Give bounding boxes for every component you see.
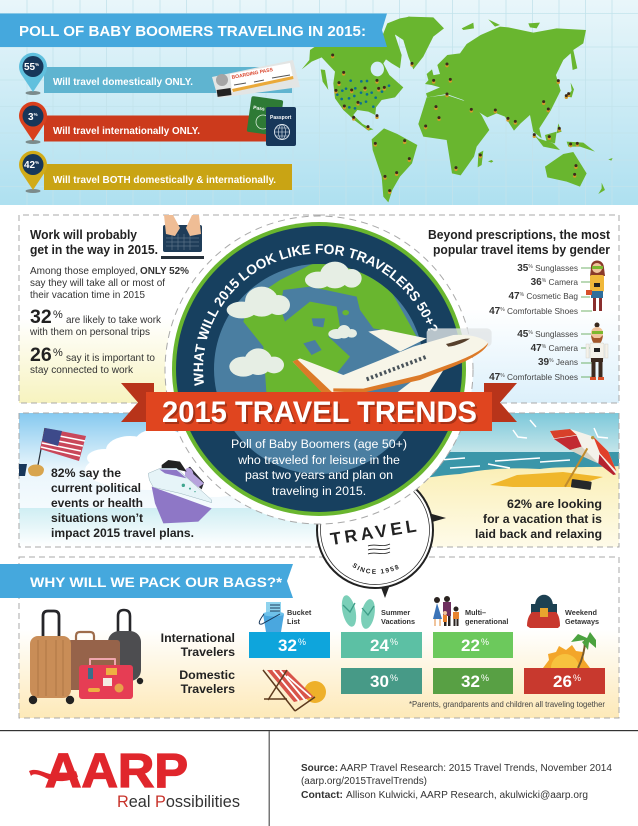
- icon: passports: Pass: [253, 105, 265, 113]
- list: women items: %: [500, 307, 505, 313]
- clouds on globe: [227, 262, 362, 377]
- row: 42 percent both: Will travel BOTH domestically & internationally.: [53, 175, 276, 186]
- row: 55 percent domestic: [19, 53, 292, 95]
- heading: items: popular travel items by gender: [433, 242, 610, 257]
- text: 62 percent: for a vacation that is: [483, 513, 603, 526]
- ring title: what will 2015 look like: WHAT WILL 2015 LOOK LIKE FOR TRAVELERS 50+?: [194, 244, 438, 386]
- row: 42 percent both: 42: [24, 160, 35, 171]
- list: men items: 47: [489, 372, 501, 383]
- list: women items: Comfortable Shoes: [505, 306, 578, 316]
- stat: 26 percent: stay connected to work: [30, 365, 134, 376]
- bar: domestic multi: [433, 668, 513, 694]
- list: women items: Cosmetic Bag: [524, 291, 578, 301]
- label: multi-generational: generational: [465, 617, 508, 626]
- bar: international bucket list: 32: [278, 636, 297, 655]
- icon: man traveler: [586, 322, 608, 380]
- lower navy text block: past two years and plan on: [245, 468, 393, 482]
- bar: domestic multi: %: [481, 673, 489, 683]
- list: men items: 45: [517, 329, 529, 340]
- list: women items: 47: [489, 306, 501, 317]
- bar: international bucket list: %: [298, 637, 306, 647]
- bar: domestic weekend: [524, 668, 605, 694]
- row: 3 percent international: 3: [28, 112, 34, 123]
- row: 3 percent international: [19, 102, 274, 144]
- central globe: [164, 216, 492, 524]
- source and contact text: Source:: [301, 763, 338, 774]
- row labels: Travelers: [181, 682, 235, 696]
- text: 82 percent: situations won’t: [51, 512, 143, 525]
- list: men items: [489, 329, 592, 383]
- text: 62 percent: laid back and relaxing: [475, 528, 602, 541]
- text: employed: their vacation time in 2015: [30, 290, 145, 301]
- list: men items: 39: [538, 357, 550, 368]
- list: women items: Sunglasses: [533, 263, 578, 273]
- stat: 32 percent: are likely to take work: [66, 315, 162, 326]
- list: men items: %: [528, 330, 533, 336]
- label: weekend getaways: Weekend: [565, 608, 597, 617]
- label: bucket list: Bucket: [287, 608, 312, 617]
- icon: beach umbrella: [550, 429, 617, 490]
- logo: AARP: AARP: [45, 745, 188, 798]
- label: weekend getaways: Getaways: [565, 617, 599, 626]
- footer: [0, 730, 638, 826]
- text: employed: ONLY 52%: [140, 266, 189, 277]
- icon: beach towel: [490, 472, 603, 487]
- icon: bucket: [259, 602, 284, 632]
- text: 82 percent: events or health: [51, 497, 143, 510]
- icon: backpack: [527, 595, 560, 628]
- bar: international summer: [341, 632, 422, 658]
- source and contact text: (aarp.org/2015TravelTrends): [301, 776, 427, 787]
- source and contact text: Allison Kulwicki, AARP Research, akulwicki@aarp.org: [346, 790, 588, 801]
- bar: international multi: [433, 632, 513, 658]
- stat: 32 percent: 32: [30, 306, 52, 328]
- logo: AARP: [29, 745, 240, 811]
- bar: domestic weekend: %: [573, 673, 581, 683]
- row labels: Domestic: [179, 668, 235, 682]
- row: 55 percent domestic: Will travel domestically ONLY.: [53, 77, 193, 88]
- main banner: 2015 travel trends: 2015 TRAVEL TRENDS: [162, 396, 477, 429]
- row labels: [161, 631, 235, 696]
- stat: 26 percent: [30, 344, 155, 376]
- icon: family: [433, 596, 459, 626]
- icon: flip-flops: [339, 594, 377, 630]
- row: 55 percent domestic: %: [35, 62, 39, 67]
- stat: 32 percent: %: [53, 309, 63, 321]
- icon: woman traveler: [586, 260, 605, 311]
- heading: work: Work will probably: [30, 227, 138, 242]
- row: 3 percent international: Will travel internationally ONLY.: [53, 126, 200, 137]
- row: 55 percent domestic: 55: [24, 62, 35, 73]
- lower navy text block: Poll of Baby Boomers (age 50+): [231, 437, 407, 451]
- heading: work: get in the way in 2015.: [30, 242, 158, 257]
- world map: [302, 17, 613, 202]
- heading banner: poll: [0, 14, 387, 47]
- label: multi-generational: Multi–: [465, 608, 486, 617]
- list: men items: Jeans: [554, 357, 578, 367]
- text: 82 percent: 82% say the: [51, 467, 122, 480]
- row: 42 percent both: [19, 151, 292, 193]
- panel: why will we pack: [0, 557, 619, 718]
- main banner: 2015 travel trends: 2015 TRAVEL TRENDS: [164, 398, 479, 431]
- bar: international bucket list: [249, 632, 330, 658]
- list: women items: %: [542, 278, 547, 284]
- icon: passports: [247, 96, 296, 146]
- globe earth: [214, 264, 421, 474]
- stat: 26 percent: %: [53, 347, 63, 359]
- bar: international multi: %: [481, 637, 489, 647]
- panel: travel items by gender: [319, 215, 619, 403]
- bar: international summer: 24: [370, 636, 389, 655]
- stat: 32 percent: [29, 306, 162, 338]
- icon: deck chair and ball: [263, 670, 326, 711]
- text: employed: Among those employed,: [30, 266, 138, 277]
- text: 82 percent: impact 2015 travel plans.: [51, 527, 194, 540]
- list: women items: Camera: [546, 277, 578, 287]
- stat: 26 percent: 26: [30, 344, 52, 366]
- row: 3 percent international: %: [34, 112, 38, 117]
- seagulls: [513, 420, 608, 438]
- row labels: International: [161, 631, 235, 645]
- bar: domestic weekend: 26: [553, 672, 572, 691]
- label: bucket list: List: [287, 617, 301, 626]
- panel: poll of baby boomers: [0, 0, 638, 205]
- bar: domestic summer: 30: [370, 672, 389, 691]
- list: women items: %: [528, 264, 533, 270]
- list: men items: %: [500, 373, 505, 379]
- list: men items: %: [542, 344, 547, 350]
- list: men items: 47: [531, 343, 542, 354]
- text: 62 percent: 62% are looking: [507, 498, 602, 511]
- bar: international multi: 22: [461, 636, 480, 655]
- bar: domestic summer: %: [390, 673, 398, 683]
- footnote: *Parents, grandparents and children all traveling together: [409, 700, 605, 709]
- heading: items: Beyond prescriptions, the most: [428, 227, 611, 242]
- bar: domestic multi: 32: [461, 672, 480, 691]
- icon: luggage: [29, 610, 143, 704]
- panel: relaxing vacation: [319, 413, 619, 547]
- row: 42 percent both: %: [35, 160, 39, 165]
- stamp: travel since 1958: SINCE 1958: [352, 563, 399, 574]
- bar: domestic summer: [341, 668, 422, 694]
- heading banner: pack: [0, 564, 293, 598]
- panel: work in the way: [19, 215, 319, 403]
- stat: 32 percent: with them on personal trips: [29, 327, 150, 338]
- icon: hands on laptop: [161, 215, 204, 259]
- list: women items: 47: [508, 291, 520, 302]
- icon: sun and palm: [543, 632, 596, 668]
- bar: international summer: %: [390, 637, 398, 647]
- icon: boarding pass: BOARDING PASS: [231, 67, 274, 81]
- list: men items: %: [549, 358, 554, 364]
- airplane: [293, 328, 492, 397]
- label: summer vacations: Summer: [381, 608, 410, 617]
- stamp: travel since 1958: [316, 489, 446, 598]
- source and contact text: [301, 763, 612, 801]
- list: women items: [489, 263, 592, 317]
- icon: boarding pass: [212, 60, 300, 98]
- logo: AARP: Real Possibilities: [117, 792, 240, 811]
- clouds: [85, 428, 255, 497]
- list: men items: Sunglasses: [533, 329, 578, 339]
- icon: american flag: [19, 428, 86, 476]
- lower navy text block: who traveled for leisure in the: [237, 453, 400, 467]
- text: 82 percent: current political: [51, 482, 141, 495]
- list: men items: Comfortable Shoes: [505, 372, 578, 382]
- list: men items: Camera: [546, 343, 578, 353]
- panel: political events: [19, 413, 319, 547]
- list: women items: 35: [517, 263, 529, 274]
- pins on map: [331, 53, 579, 194]
- label: summer vacations: Vacations: [381, 617, 415, 626]
- main banner: 2015 travel trends: [121, 383, 517, 431]
- list: women items: %: [520, 292, 525, 298]
- stamp: travel since 1958: TRAVEL: [329, 515, 421, 549]
- source and contact text: Contact:: [301, 790, 343, 801]
- icon: passports: Passport: [270, 115, 292, 121]
- list: women items: 36: [531, 277, 542, 288]
- icon: cruise ship: [148, 460, 212, 523]
- text: employed: say they will take all or most of: [30, 278, 165, 289]
- source and contact text: AARP Travel Research: 2015 Travel Trends, November 2014: [340, 763, 612, 774]
- heading banner: pack: WHY WILL WE PACK OUR BAGS?*: [30, 574, 283, 590]
- lower navy text block: traveling in 2015.: [272, 484, 366, 498]
- row labels: Travelers: [181, 645, 235, 659]
- stat: 26 percent: say it is important to: [66, 353, 155, 364]
- heading banner: poll: POLL OF BABY BOOMERS TRAVELING IN 2015:: [19, 24, 366, 40]
